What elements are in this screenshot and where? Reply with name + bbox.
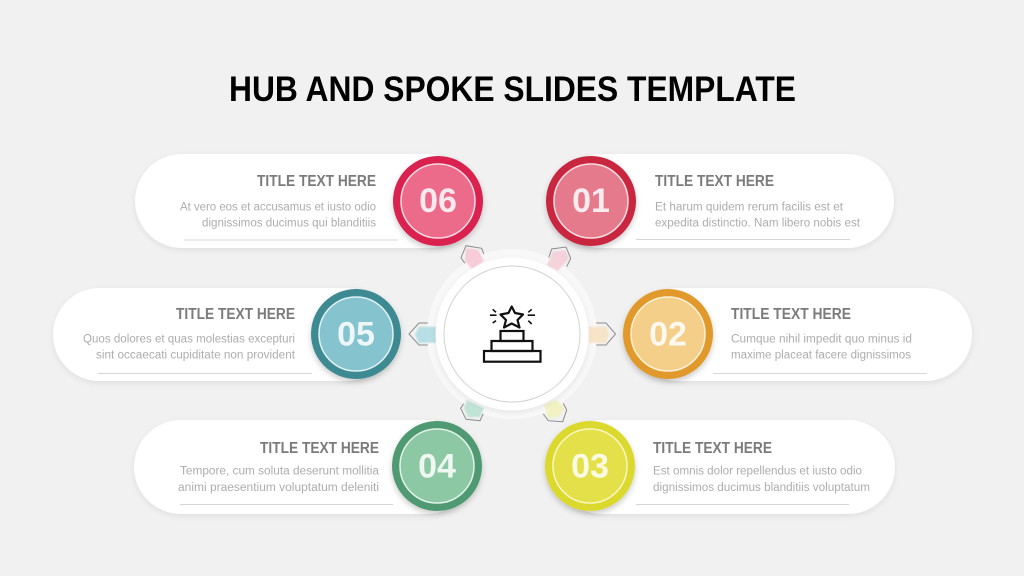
panel: item 03: 03	[571, 448, 609, 486]
panel: item 04: Tempore, cum soluta deserunt mollitia	[180, 466, 380, 478]
panel: item 06: At vero eos et accusamus et iusto odio	[180, 202, 376, 214]
panel: item 01: Et harum quidem rerum facilis est et	[655, 202, 844, 214]
panel: item 03	[545, 420, 895, 514]
panel: item 06: dignissimos ducimus qui blanditiis	[202, 218, 376, 230]
panel: item 06: TITLE TEXT HERE	[257, 173, 376, 190]
panel: item 01	[546, 154, 894, 248]
panel: item 04: animi praesentium voluptatum deleniti	[178, 482, 379, 494]
spoke marker fills	[415, 248, 609, 418]
panel: item 05: Quos dolores et quas molestias excepturi	[83, 334, 295, 346]
panel: item 04	[134, 420, 482, 514]
panel: item 03: Est omnis dolor repellendus et iusto odio	[653, 466, 862, 478]
panel: item 04: TITLE TEXT HERE	[260, 440, 379, 457]
panel: item 02: TITLE TEXT HERE	[731, 306, 851, 323]
panel: item 06: 06	[419, 182, 457, 220]
panel: item 05	[53, 288, 401, 381]
panel: item 02: maxime placeat facere dignissimos	[731, 350, 911, 362]
hub outer ring	[427, 249, 597, 419]
panel: item 02: 02	[649, 316, 687, 354]
panel: item 01: TITLE TEXT HERE	[655, 173, 774, 190]
icon: podium with star	[484, 306, 540, 362]
spoke marker outlines	[409, 246, 616, 422]
title: HUB AND SPOKE SLIDES TEMPLATE	[229, 70, 796, 109]
panel: item 06	[135, 154, 483, 248]
panel: item 05: 05	[337, 316, 375, 354]
panel: item 01: 01	[572, 182, 610, 220]
panel: item 05: TITLE TEXT HERE	[176, 306, 295, 323]
panel: item 05: sint occaecati cupiditate non provident	[96, 350, 296, 362]
panel: item 03: TITLE TEXT HERE	[653, 440, 772, 457]
central hub	[436, 258, 588, 410]
panel: item 01: expedita distinctio. Nam libero nobis est	[655, 218, 861, 230]
panel: item 04: 04	[418, 448, 456, 486]
panel: item 02	[623, 288, 972, 381]
panel: item 03: dignissimos ducimus blanditiis voluptatum	[653, 482, 870, 494]
panel: item 02: Cumque nihil impedit quo minus id	[731, 334, 912, 346]
